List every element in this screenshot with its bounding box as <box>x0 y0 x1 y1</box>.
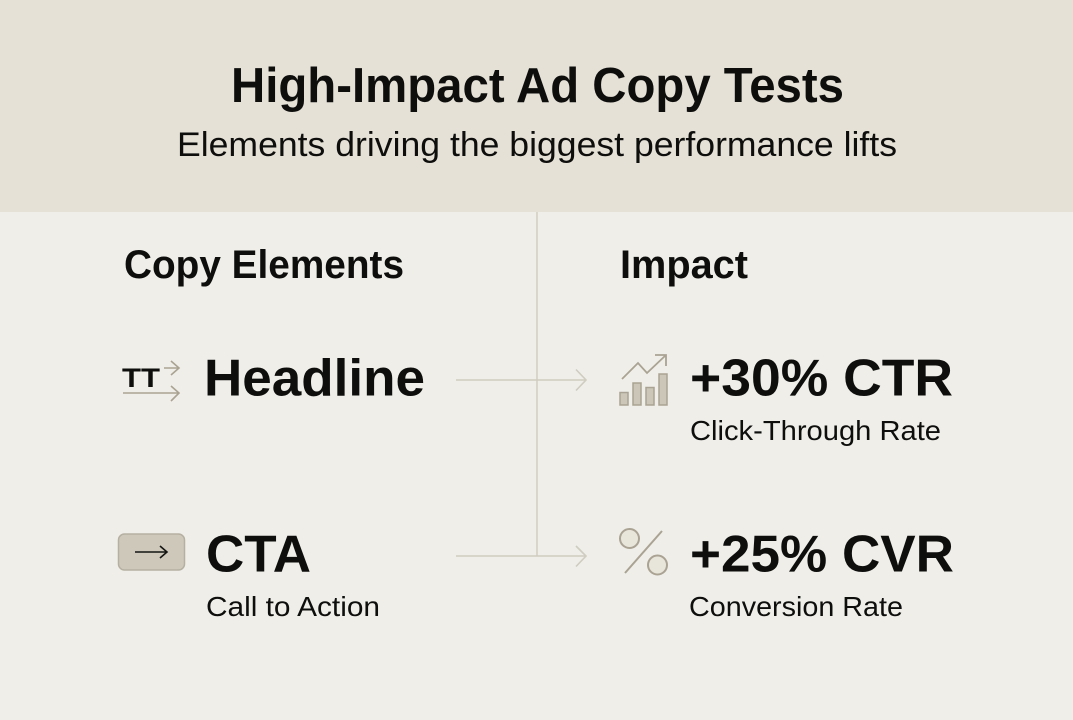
label: CTA: CTA <box>206 526 311 584</box>
metric: CTR <box>690 350 953 446</box>
sublabel: click-through rate: Click-Through Rate <box>690 415 941 446</box>
label: headline: Headline <box>204 350 425 408</box>
label: CTA <box>206 526 380 622</box>
icon: bar chart with trend arrow <box>620 355 667 405</box>
title: High-Impact Ad Copy Tests <box>231 59 844 113</box>
icon: headline text with arrows: TT <box>122 363 161 393</box>
metric: CVR <box>689 526 954 622</box>
metric: CTR: +30% CTR <box>690 350 953 408</box>
metric: CVR: +25% CVR <box>690 526 954 584</box>
connector lines <box>456 212 586 566</box>
heading: copy elements: Copy Elements <box>124 243 404 287</box>
sublabel: conversion rate: Conversion Rate <box>689 591 903 622</box>
icon: percent sign <box>620 529 667 574</box>
header band <box>0 0 1073 212</box>
heading: impact: Impact <box>620 243 748 287</box>
icon: CTA button <box>118 534 184 570</box>
icon: headline text with arrows <box>122 361 179 401</box>
sublabel: call to action: Call to Action <box>206 591 380 622</box>
subtitle: Elements driving the biggest performance lifts <box>177 126 897 164</box>
